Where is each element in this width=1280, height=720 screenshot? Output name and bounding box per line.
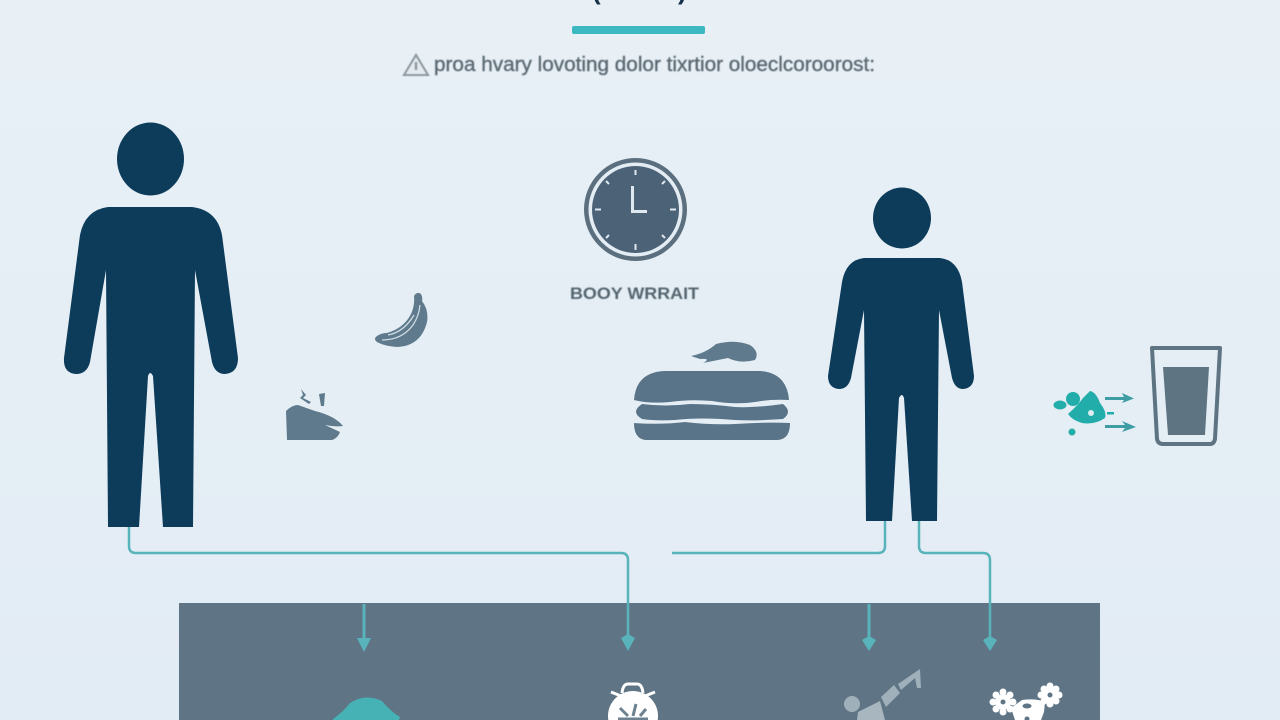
burger leaf bbox=[691, 342, 757, 363]
icon: burger bbox=[634, 342, 790, 440]
icon: clock bbox=[584, 158, 687, 261]
connector: right person right leg to panel bbox=[919, 521, 997, 651]
figure: large person bbox=[64, 122, 238, 527]
icon: white gears bbox=[990, 682, 1062, 720]
title remnant bbox=[592, 0, 687, 5]
figure: small person bbox=[828, 188, 974, 521]
warning note bbox=[404, 53, 875, 76]
burger layers bbox=[634, 371, 789, 403]
left gear bbox=[990, 688, 1016, 716]
warning text: proa hvary lovoting dolor tixrtior oloeclcoroorost: bbox=[434, 53, 875, 76]
icon: grey arrow bbox=[844, 669, 921, 720]
arrow: first bbox=[357, 604, 371, 652]
label: body weight: BOOY WRRAIT bbox=[570, 284, 700, 303]
panel: bottom bbox=[179, 603, 1100, 720]
icon: teal splash with arrows bbox=[1054, 391, 1136, 436]
icon: glass of water bbox=[1152, 348, 1220, 444]
title underline bbox=[572, 26, 705, 34]
icon: warning triangle bbox=[404, 55, 428, 75]
icon: banana bbox=[375, 293, 427, 347]
centre gear bbox=[1011, 699, 1045, 720]
icon: teal mound bbox=[333, 697, 400, 720]
connector: right person left leg bbox=[672, 521, 885, 553]
arrow: third bbox=[862, 604, 876, 651]
connector: left person to panel bbox=[129, 527, 635, 651]
right gear bbox=[1038, 682, 1062, 708]
icon: bread slice with steam bbox=[286, 389, 343, 440]
icon: stopwatch bbox=[608, 684, 658, 720]
